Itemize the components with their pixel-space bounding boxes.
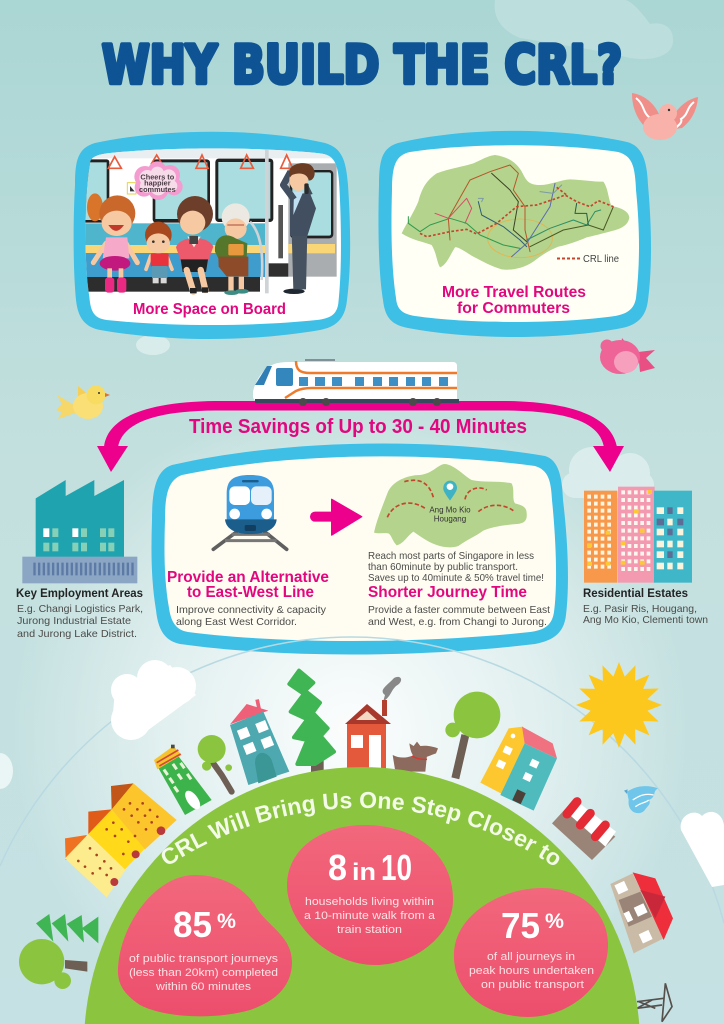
background cloud top right xyxy=(495,0,673,59)
stat: 85 percent xyxy=(118,875,292,1016)
map: Singapore with Ang Mo Kio and Hougang: Ang Mo Kio xyxy=(429,505,471,514)
crane xyxy=(637,983,672,1022)
stat: 85 percent: within 60 minutes xyxy=(155,981,252,993)
arrow: magenta right xyxy=(310,499,362,535)
stat: 75 percent xyxy=(454,888,608,1017)
text block: shorter journey time: Saves up to 40minute & 50% travel time! xyxy=(368,572,544,584)
legend: CRL line: CRL line xyxy=(583,254,619,265)
figure: boy xyxy=(145,222,172,283)
sign: cheers to happier commutes xyxy=(127,161,183,200)
sign: cheers to happier commutes: Cheers to xyxy=(140,172,175,181)
background cloud under first panel xyxy=(136,335,170,355)
yellow and teal house xyxy=(480,727,557,811)
text block: key employment areas xyxy=(16,588,143,640)
stat: 75 percent: on public transport xyxy=(481,979,584,991)
caption: more travel routes for commuters: for Commuters xyxy=(457,300,570,317)
text block: provide an alternative to East-West Line: along East West Corridor. xyxy=(176,616,297,628)
yellow terrace houses xyxy=(65,783,177,897)
text block: shorter journey time: and West, e.g. from Changi to Jurong. xyxy=(368,616,547,628)
caption: more space on board: More Space on Board xyxy=(133,301,286,318)
stat: 75 percent: peak hours undertaken xyxy=(469,965,594,977)
stat: 8 in 10: a 10-minute walk from a xyxy=(304,910,436,922)
icon: residential apartment blocks xyxy=(584,487,692,583)
stat: 85 percent: of public transport journeys xyxy=(129,953,279,965)
stat: 8 in 10 xyxy=(287,825,453,965)
caption: more travel routes for commuters: More Travel Routes xyxy=(442,284,586,301)
stat: 85 percent: (less than 20km) completed xyxy=(129,967,278,979)
text block: provide an alternative to East-West Line: to East-West Line xyxy=(187,584,314,601)
map: Singapore with Ang Mo Kio and Hougang: Hougang xyxy=(434,514,466,523)
text block: provide an alternative to East-West Line: Provide an Alternative xyxy=(167,569,329,586)
house with red roof xyxy=(610,872,673,953)
stat: 75 percent: % xyxy=(545,910,564,933)
stat: 8 in 10: 10 xyxy=(381,847,412,888)
dog xyxy=(393,742,438,772)
map: Singapore with Ang Mo Kio and Hougang xyxy=(374,464,527,547)
figure: grandmother xyxy=(215,203,250,295)
caption: more travel routes for commuters xyxy=(442,284,586,317)
shop with striped awning xyxy=(552,800,616,860)
sideways pine left xyxy=(36,914,98,943)
sign: cheers to happier commutes: commutes xyxy=(139,185,176,194)
green apartment xyxy=(154,745,212,815)
text block: shorter journey time: than 60minute by public transport. xyxy=(368,561,518,573)
cloud at right edge xyxy=(681,812,724,887)
pine tree xyxy=(289,671,334,773)
stat: 75 percent: of all journeys in xyxy=(487,951,575,963)
panel: alternative line and shorter journey xyxy=(151,443,568,654)
text block: shorter journey time xyxy=(368,550,550,628)
stat: 8 in 10: households living within xyxy=(305,896,434,908)
round tree xyxy=(445,692,500,778)
round tree left xyxy=(19,939,87,989)
stat: 75 percent: 75 xyxy=(501,905,540,946)
curved heading: CRL Will Bring Us One Step Closer to xyxy=(162,792,560,865)
icon: grab handles xyxy=(108,155,293,168)
text block: key employment areas: E.g. Changi Logistics Park, xyxy=(17,603,143,615)
legend: CRL line xyxy=(557,254,619,265)
stat: 8 in 10: train station xyxy=(337,924,402,936)
text block: residential estates: Residential Estates xyxy=(583,588,688,600)
stat: 8 in 10: 8 xyxy=(328,847,347,888)
text block: key employment areas: and Jurong Lake District. xyxy=(17,628,137,640)
city skyline right xyxy=(393,692,673,1022)
figure: standing man on phone xyxy=(283,163,316,294)
figure: girl xyxy=(87,193,137,293)
small tree xyxy=(198,735,232,792)
cloud upper left of city xyxy=(111,660,196,740)
figure: woman with phone xyxy=(176,196,213,293)
arrow: time savings branching to both sides xyxy=(97,401,624,472)
green hill xyxy=(85,767,639,1024)
map: Singapore with rail lines xyxy=(402,155,629,270)
cloud behind residential icon xyxy=(562,447,654,498)
text block: shorter journey time: Reach most parts of Singapore in less xyxy=(368,550,534,562)
text block: shorter journey time: Shorter Journey Time xyxy=(368,584,527,601)
text block: provide an alternative to East-West Line xyxy=(167,569,329,628)
text block: provide an alternative to East-West Line: Improve connectivity & capacity xyxy=(176,604,327,616)
icon: pink bird top right xyxy=(632,93,698,140)
panel: more space on board xyxy=(74,132,350,339)
text block: shorter journey time: Provide a faster commute between East xyxy=(368,604,550,616)
text block: key employment areas: Key Employment Areas xyxy=(16,588,143,600)
stat: 85 percent: 85 xyxy=(173,904,212,945)
icon: train front on tracks xyxy=(213,475,287,549)
icon: factory for key employment areas xyxy=(22,480,137,583)
title: WHY BUILD THE CRL? xyxy=(102,35,622,96)
panel: more travel routes xyxy=(378,131,651,337)
text block: residential estates xyxy=(583,588,708,626)
heading: time savings: Time Savings of Up to 30 - 40 Minutes xyxy=(189,416,527,438)
sun xyxy=(576,662,662,748)
sign: cheers to happier commutes: happier xyxy=(144,179,171,188)
red house with smoking chimney xyxy=(345,677,401,770)
city skyline left xyxy=(19,671,334,989)
icon: yellow bird left xyxy=(56,386,110,419)
cloud at left edge xyxy=(0,753,13,789)
orbit arc xyxy=(0,637,724,923)
text block: key employment areas: Jurong Industrial Estate xyxy=(17,615,131,627)
icon: train on arc xyxy=(253,360,459,406)
blue bird xyxy=(624,786,658,813)
illustration: train carriage scene xyxy=(80,148,347,325)
text block: residential estates: Ang Mo Kio, Clementi town xyxy=(583,614,708,626)
text block: residential estates: E.g. Pasir Ris, Hougang, xyxy=(583,603,697,615)
stat: 8 in 10: in xyxy=(352,859,376,886)
stat: 85 percent: % xyxy=(217,910,236,933)
icon: pink bird right xyxy=(600,338,655,374)
teal house xyxy=(230,699,289,785)
